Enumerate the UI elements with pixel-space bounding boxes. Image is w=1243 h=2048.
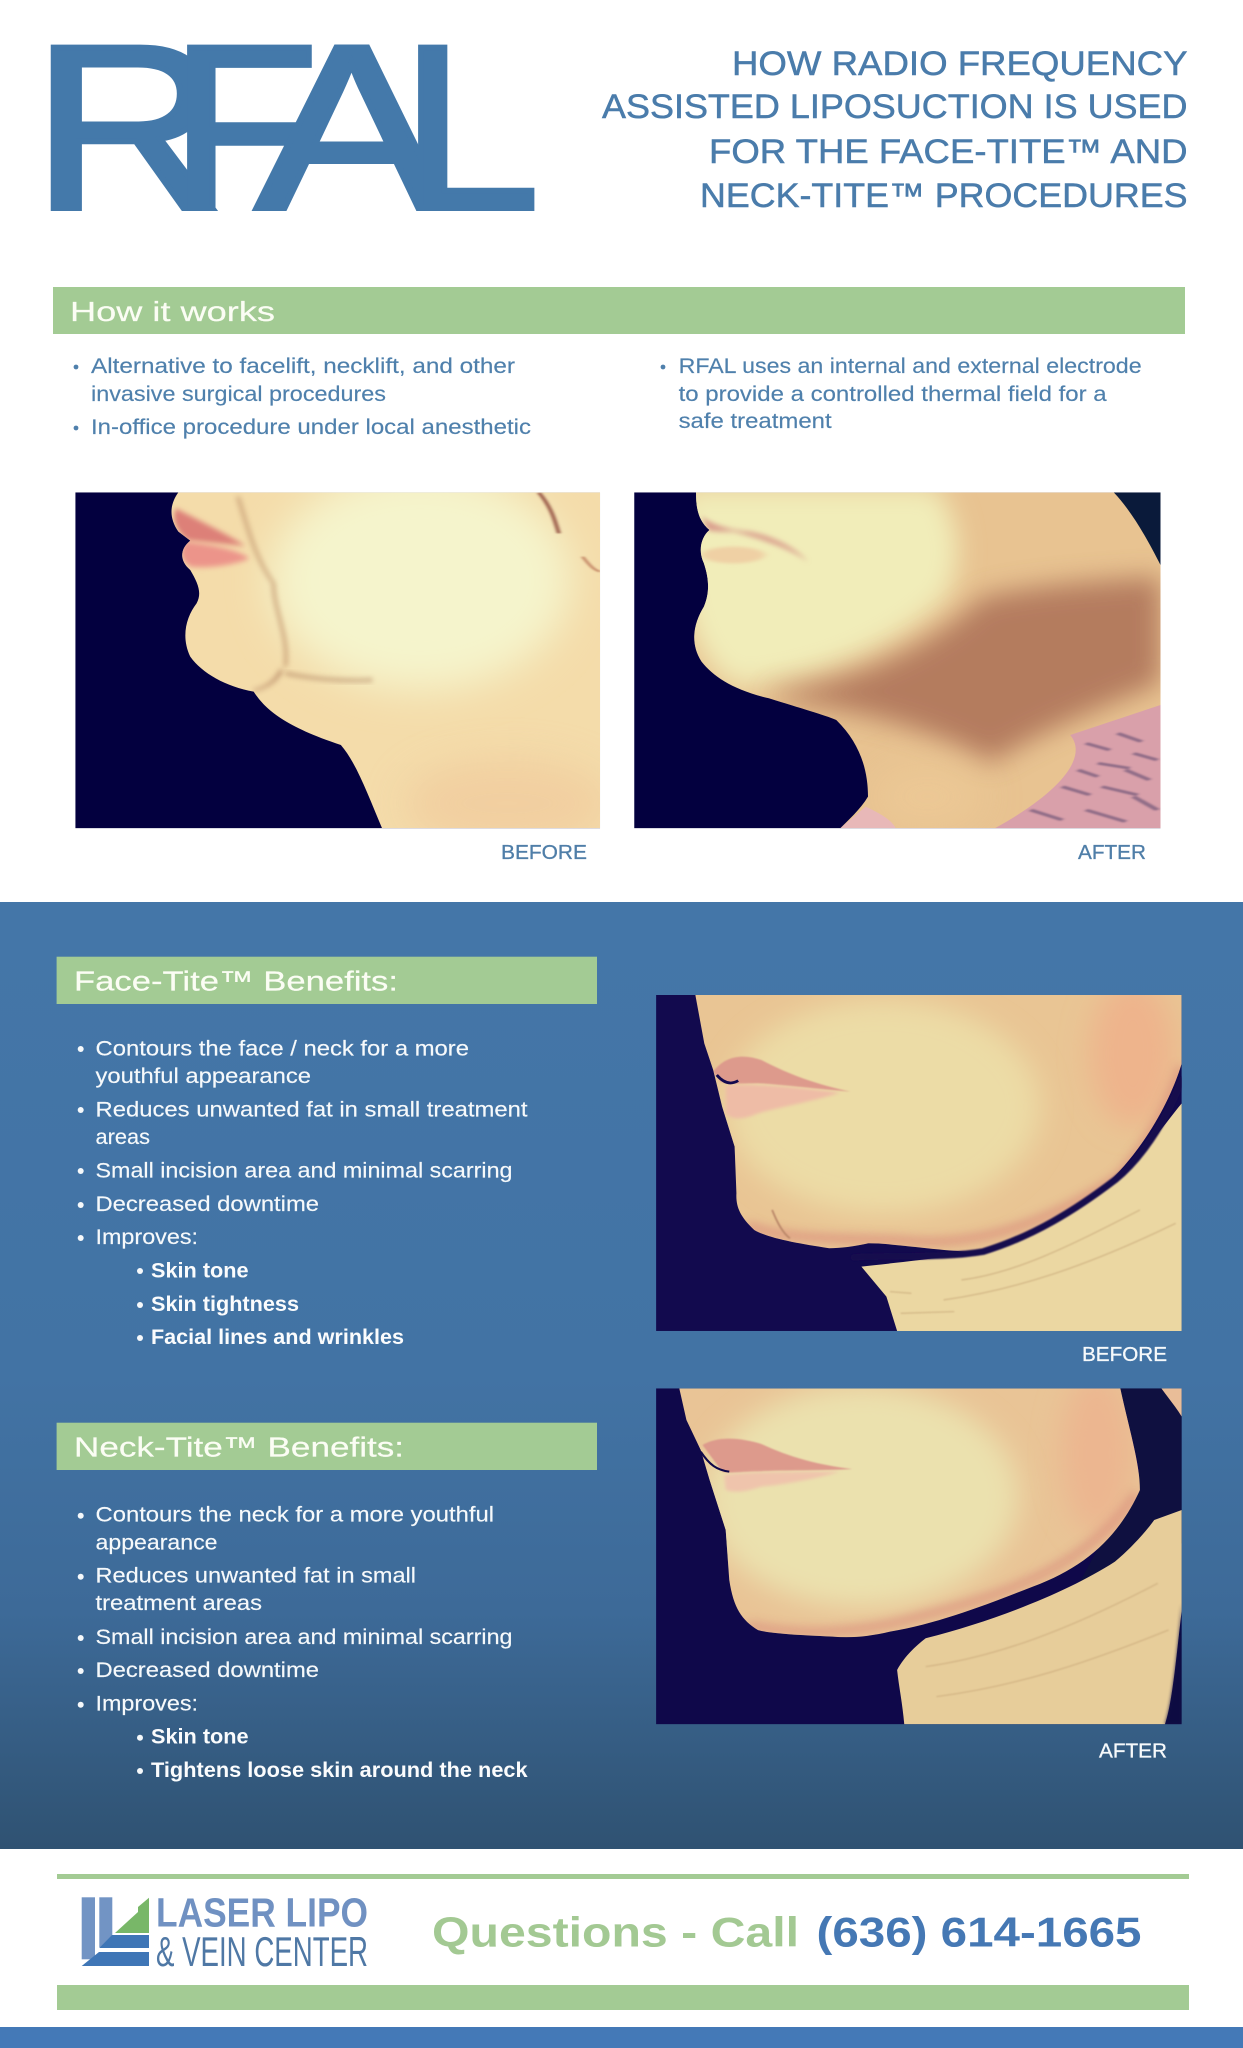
text block: neck-tite bullets: Skin tone [151,1726,249,1749]
call to action: (636) 614-1665 [816,1909,1142,1956]
title: ASSISTED LIPOSUCTION IS USED [602,88,1188,126]
text block: neck-tite bullets: Decreased downtime [96,1659,319,1682]
bottom strip [0,2027,1243,2048]
text block: left bullets: In-office procedure under local anesthetic [91,416,531,439]
RFAL logo: R [32,0,225,259]
text block: face-tite bullets: Skin tone [151,1260,249,1283]
text block: neck-tite bullets: Small incision area and minimal scarring [96,1626,512,1649]
panel: footer [57,1874,1189,2010]
call to action [432,1909,1142,1956]
text block: left bullets: invasive surgical procedures [91,383,386,406]
text block: face-tite bullets: Small incision area and minimal scarring [96,1160,512,1183]
text block: face-tite bullets: Skin tightness [151,1293,299,1316]
text block: neck-tite bullets [78,1504,528,1782]
icon: laser lipo logo mark [82,1897,149,1966]
caption: after: AFTER [1099,1741,1167,1763]
text block: face-tite bullets: Facial lines and wrinkles [151,1326,404,1349]
heading: neck-tite benefits: Neck-Tite™ Benefits: [74,1432,404,1463]
RFAL logo: L [400,0,540,259]
text block: neck-tite bullets: Contours the neck for a more youthful [96,1504,494,1527]
logo text: laser lipo and vein center: & VEIN CENTER [156,1928,368,1975]
text block: right bullet: to provide a controlled thermal field for a [679,383,1107,406]
text block: right bullet: RFAL uses an internal and external electrode [679,355,1142,378]
logo text: laser lipo and vein center [156,1890,368,1975]
logo text: laser lipo and vein center: LASER LIPO [156,1890,368,1936]
photo: before, lower face [656,980,1182,1331]
text block: neck-tite bullets: Tightens loose skin around the neck [151,1759,528,1782]
text block: face-tite bullets: Improves: [96,1226,198,1249]
photo: after, lower face [656,1373,1182,1724]
text block: left bullets: Alternative to facelift, necklift, and other [91,355,515,378]
heading: face-tite benefits: Face-Tite™ Benefits: [74,966,398,997]
RFAL logo: A [256,0,448,259]
title [602,45,1188,215]
RFAL logo [32,0,540,259]
heading: how it works [53,287,1185,334]
panel: benefits [0,902,1243,1849]
title: FOR THE FACE-TITE™ AND [709,133,1188,171]
text block: face-tite bullets: Reduces unwanted fat in small treatment [96,1099,528,1122]
RFAL logo: F [170,0,319,258]
text block: neck-tite bullets: appearance [96,1531,218,1554]
text block: face-tite bullets: areas [96,1126,150,1149]
photo: before, side profile [75,492,600,828]
text block: neck-tite bullets: Improves: [96,1693,198,1716]
title: HOW RADIO FREQUENCY [732,45,1188,83]
text block: neck-tite bullets: treatment areas [96,1592,262,1615]
heading: face-tite benefits [57,957,597,1004]
panel: how it works [53,287,1185,864]
caption: after: AFTER [1078,842,1146,864]
text block: right bullet: safe treatment [679,410,832,433]
text block: left bullets [74,355,531,439]
text block: face-tite bullets [78,1038,528,1349]
caption: before: BEFORE [1082,1344,1167,1366]
title: NECK-TITE™ PROCEDURES [700,177,1188,215]
photo: after, side profile [634,487,1161,828]
text block: right bullet [661,355,1142,433]
caption: before: BEFORE [501,842,587,864]
text block: face-tite bullets: Contours the face / neck for a more [96,1038,469,1061]
text block: face-tite bullets: Decreased downtime [96,1193,319,1216]
heading: neck-tite benefits [57,1423,597,1470]
heading: how it works: How it works [70,296,275,327]
text block: neck-tite bullets: Reduces unwanted fat in small [96,1565,416,1588]
text block: face-tite bullets: youthful appearance [96,1065,311,1088]
call to action: Questions - Call [432,1909,799,1956]
